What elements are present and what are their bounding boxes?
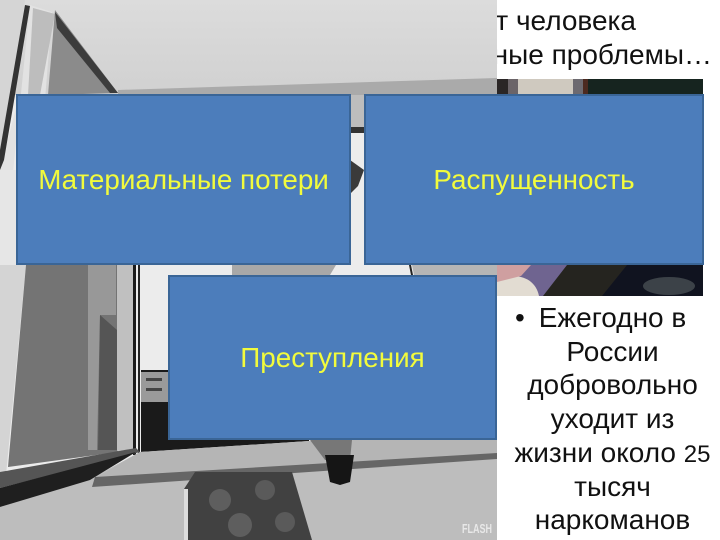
bullet text block: уходит из	[551, 403, 674, 434]
figure between the boxes	[232, 95, 497, 275]
bullet text block: наркоманов	[535, 504, 690, 535]
bullet text block: тысяч	[574, 471, 651, 502]
ceiling	[0, 0, 497, 100]
window frame	[0, 0, 118, 300]
photo: people in dark room	[497, 79, 703, 296]
box: crimes: Преступления	[240, 342, 425, 372]
heading text partly hidden by photo	[444, 5, 712, 70]
box: material losses: Материальные потери	[38, 164, 329, 194]
outside view	[141, 370, 309, 452]
bullet text block	[514, 302, 710, 535]
bullet text block: жизни около 25	[515, 437, 710, 468]
box: licentiousness: Распущенность	[433, 164, 635, 194]
bullet text block: России	[566, 336, 659, 367]
box: crimes	[168, 275, 497, 440]
window sill and floor	[0, 436, 497, 540]
chair	[184, 472, 312, 540]
bullet text block: Ежегодно в	[539, 302, 686, 333]
bullet text block: •	[515, 302, 525, 333]
photo: open window black and white	[0, 0, 497, 540]
leg and shoe	[310, 440, 354, 485]
bullet text block: добровольно	[527, 369, 698, 400]
window pane	[0, 265, 140, 488]
heading text partly hidden by photo: от человека	[480, 5, 636, 36]
box: material losses	[16, 94, 351, 265]
heading text partly hidden by photo: важные проблемы…	[444, 39, 712, 70]
box: licentiousness	[364, 94, 704, 265]
